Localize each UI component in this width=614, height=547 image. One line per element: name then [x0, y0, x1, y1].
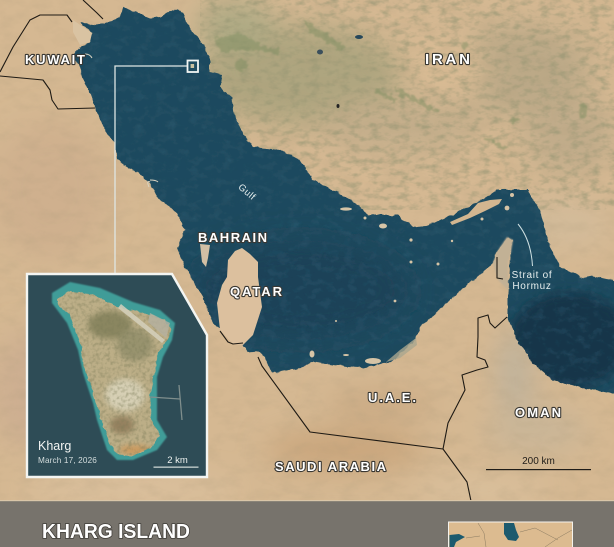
icon: jetty: [150, 385, 182, 420]
country labels: U.A.E.: [368, 390, 416, 405]
label: Strait of Hormuz with arc: Hormuz: [512, 281, 552, 292]
vegetation patches: [215, 18, 587, 149]
Qatar and Bahrain land: [200, 244, 262, 345]
locator mini map: [448, 522, 572, 547]
icon: reef around island: [52, 282, 175, 460]
water: the Gulf and Gulf of Oman: [74, 6, 614, 394]
leader line from locator box to inset: [115, 60, 198, 274]
icon: airstrip: [118, 304, 165, 343]
Kuwait and Saudi shoals: [85, 54, 158, 187]
small islands: [310, 193, 514, 364]
label: Kharg: Kharg: [38, 439, 71, 453]
shallows along the U.A.E. coast: [386, 338, 417, 362]
Musandam peninsula and Oman coast detail: [493, 237, 513, 290]
panel: Kharg inset satellite image: [27, 274, 207, 477]
country borders: [0, 0, 507, 501]
icon: Kharg locator box: [188, 60, 198, 72]
Kuwait bay spit and Shatt delta: [73, 20, 92, 45]
country labels: BAHRAIN: [198, 230, 267, 245]
label: date: March 17, 2026: [38, 456, 97, 465]
icon: Qeshm island: [450, 199, 502, 225]
country labels: SAUDI ARABIA: [275, 459, 387, 474]
country labels: QATAR: [230, 284, 283, 299]
scale bar: 2 km: 2 km: [167, 455, 188, 466]
label: Strait of Hormuz with arc: Strait of: [512, 270, 552, 281]
label: Strait of Hormuz with arc: [512, 224, 552, 292]
heading: KHARG ISLAND: [42, 521, 190, 543]
footer bar: [0, 500, 614, 547]
icon: Kharg island land: [57, 291, 172, 456]
scale bar: 200 km: [486, 456, 591, 470]
country labels: IRAN: [425, 51, 470, 68]
icon: Caspian/gulf water on locator: [504, 523, 519, 541]
country labels: [25, 51, 561, 474]
scale bar: 2 km: [154, 455, 198, 468]
scale bar: 200 km: 200 km: [522, 456, 555, 467]
country labels: KUWAIT: [25, 52, 85, 67]
inset border: [27, 274, 207, 477]
label: Gulf: Gulf: [236, 182, 258, 203]
country labels: OMAN: [515, 405, 561, 420]
lakes: [355, 35, 363, 39]
